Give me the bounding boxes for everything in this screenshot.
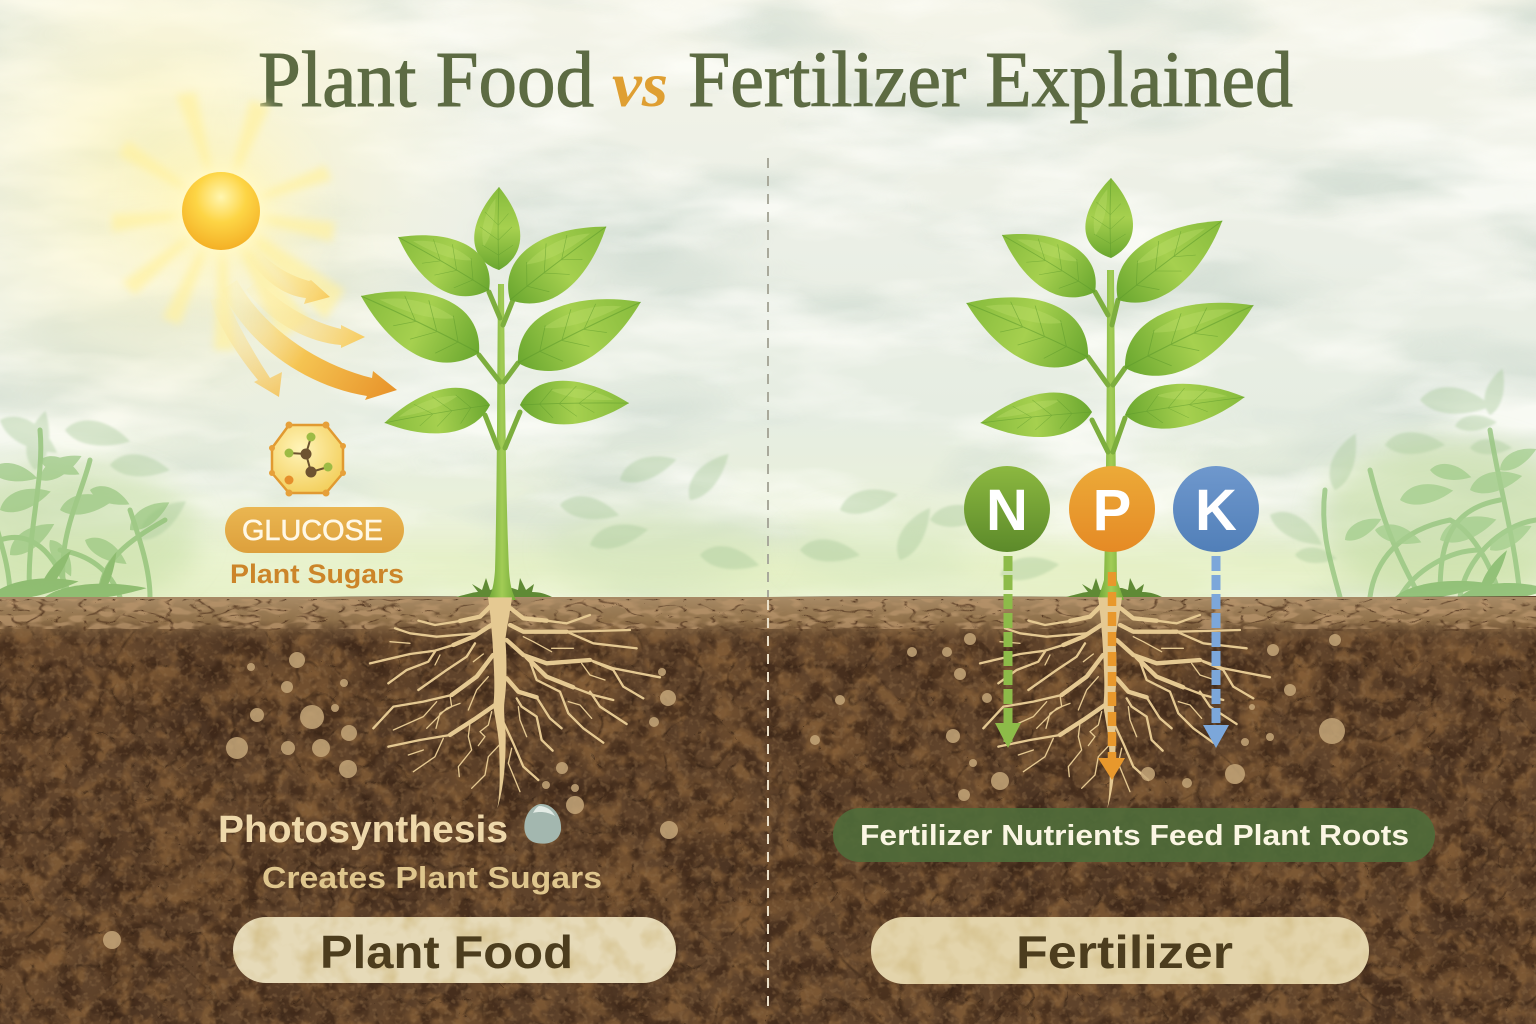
branches <box>1088 292 1125 452</box>
stem <box>488 284 516 600</box>
plant illustration <box>955 178 1266 600</box>
icon: sun <box>96 86 346 350</box>
grass tuft <box>456 578 552 597</box>
stem <box>1098 270 1124 600</box>
label pill: fertilizer <box>871 917 1369 984</box>
nutrient P: circle and arrow <box>1069 466 1155 780</box>
leaves <box>955 178 1266 443</box>
sky background <box>0 0 1536 600</box>
mid foliage: right clump <box>1324 430 1536 604</box>
title: Fertilizer Explained <box>688 37 1293 124</box>
label pill: plant food: Plant Food <box>320 926 573 978</box>
nutrient N: circle and arrow: N <box>986 478 1028 543</box>
photosynthesis text: Photosynthesis <box>218 809 508 851</box>
topsoil cobbles <box>0 599 1536 631</box>
plant sugars label: Plant Sugars <box>230 559 404 589</box>
nutrient K: circle and arrow: K <box>1195 478 1237 543</box>
roots <box>370 597 660 808</box>
arrow: sunlight 2 <box>246 280 365 348</box>
nutrient K: circle and arrow <box>1173 466 1259 748</box>
glucose pill <box>225 507 404 553</box>
soil ground <box>0 596 1536 1024</box>
soil pebbles <box>103 652 678 949</box>
label pill: fertilizer: Fertilizer <box>1016 926 1233 978</box>
icon: glucose molecule <box>269 422 346 496</box>
soil pebbles <box>810 633 1345 801</box>
grass tuft <box>1066 578 1162 597</box>
roots <box>980 597 1270 808</box>
topsoil stones <box>0 599 1536 629</box>
topsoil band <box>0 597 1536 643</box>
fertilizer caption pill <box>833 808 1435 862</box>
background foliage <box>0 366 1536 605</box>
leaves <box>349 187 653 443</box>
fertilizer caption pill: Fertilizer Nutrients Feed Plant Roots <box>860 820 1409 852</box>
plant illustration <box>349 187 653 600</box>
panel divider <box>767 158 769 1010</box>
panel: fertilizer <box>810 178 1435 984</box>
pale distant leaves <box>0 366 1512 584</box>
label pill: plant food <box>233 917 676 983</box>
arrow: sunlight 1 <box>248 250 330 304</box>
icon: stone <box>524 804 561 844</box>
glucose pill: GLUCOSE <box>242 515 383 547</box>
title: Plant Food <box>258 37 594 124</box>
panel: plant food <box>96 86 678 983</box>
branches <box>479 292 520 448</box>
title <box>258 37 1293 124</box>
creates plant sugars text: Creates Plant Sugars <box>262 860 602 895</box>
nutrient P: circle and arrow: P <box>1093 478 1131 543</box>
mid foliage: left clump <box>0 430 173 604</box>
arrow: sunlight to leaf <box>222 280 397 400</box>
title: vs <box>612 49 668 120</box>
nutrient N: circle and arrow <box>964 466 1050 748</box>
arrow: sunlight to glucose <box>210 297 282 397</box>
